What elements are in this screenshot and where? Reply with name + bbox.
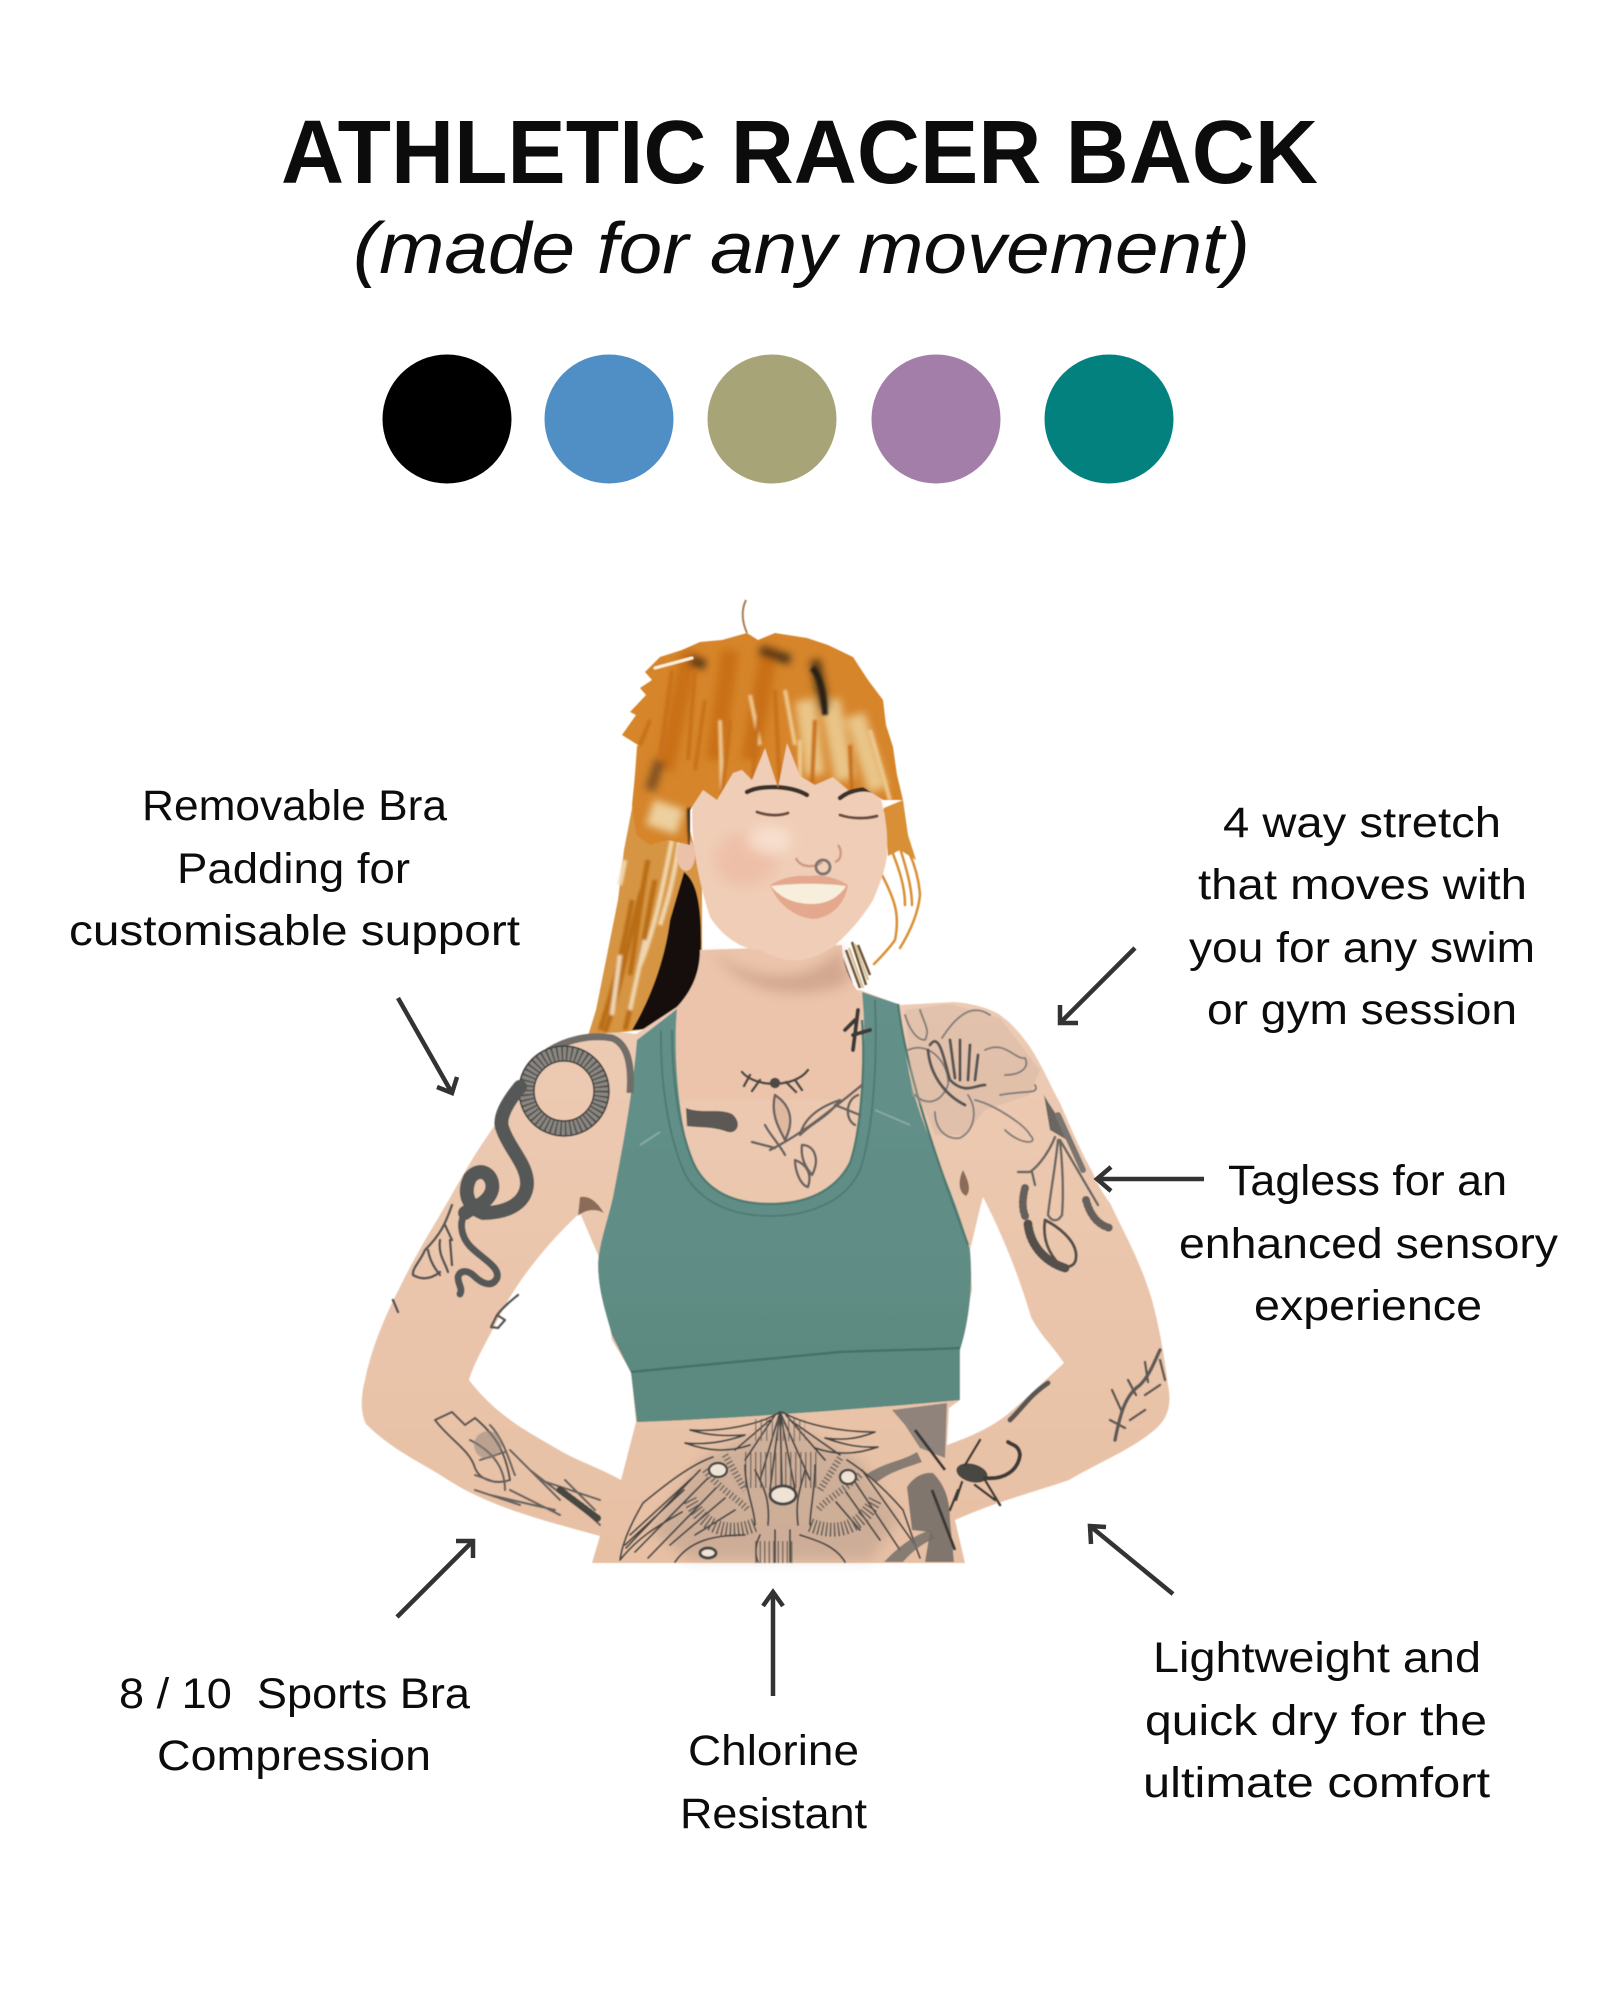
tattoo: snake head on chest	[686, 1108, 738, 1132]
peony centre	[928, 1040, 985, 1105]
arrow: chlorine	[763, 1592, 783, 1696]
arrow: stretch	[1060, 948, 1135, 1023]
tattoo: abdomen wings	[620, 1412, 920, 1562]
swatch: teal	[1044, 354, 1174, 484]
back hair	[588, 745, 920, 1036]
callout: 4 way stretch: that moves with	[1198, 861, 1527, 909]
tattoo: chest branch	[752, 1010, 870, 1187]
callout: tagless: experience	[1254, 1282, 1482, 1330]
callout: removable padding: Padding for	[177, 845, 410, 893]
tattoo: abdomen dark figure	[867, 1403, 955, 1562]
fringe and top hair	[610, 600, 910, 855]
tattoo: right forearm marks and thorn vine	[1010, 1350, 1165, 1440]
tattoo: right forearm scorpion	[950, 1440, 1020, 1510]
eyebrows	[747, 787, 878, 798]
callout: chlorine: Chlorine	[688, 1727, 859, 1775]
callout: chlorine	[680, 1727, 867, 1838]
big wings	[620, 1457, 920, 1560]
wing eyes	[709, 1463, 727, 1477]
callout: compression	[119, 1670, 470, 1780]
armpit shadows	[578, 1170, 969, 1216]
arrow: removable padding	[398, 998, 457, 1093]
upper feathers	[685, 1412, 878, 1453]
callout: lightweight	[1143, 1634, 1490, 1807]
arrow: lightweight	[1090, 1526, 1173, 1594]
model photo illustration	[362, 600, 1169, 1563]
callout: lightweight: quick dry for the	[1145, 1697, 1487, 1745]
tattoo: snake on left arm	[458, 1037, 630, 1294]
back right strands	[842, 942, 870, 988]
callout: tagless: enhanced sensory	[1179, 1220, 1559, 1268]
ear	[677, 839, 695, 871]
underband	[631, 1348, 960, 1422]
callout: 4 way stretch: you for any swim	[1189, 924, 1535, 972]
right wisps	[884, 800, 916, 860]
callout: removable padding	[69, 782, 520, 955]
subtitle: (made for any movement)	[353, 209, 1250, 289]
callout: tagless	[1179, 1157, 1559, 1330]
stems	[1018, 1137, 1098, 1220]
skin: arms and torso	[362, 990, 1169, 1563]
face	[677, 735, 887, 961]
callout: 4 way stretch	[1189, 799, 1535, 1034]
neck	[672, 945, 866, 1100]
swatch: olive	[708, 354, 836, 484]
colour swatches	[382, 354, 1174, 484]
overall tonal shading of the wings	[650, 1420, 900, 1560]
tattoo: left forearm figure	[435, 1412, 600, 1525]
arrow: tagless	[1097, 1167, 1204, 1191]
callout: tagless: Tagless for an	[1228, 1157, 1507, 1205]
gap right of waist	[947, 1197, 1064, 1445]
tattoo: necklace	[742, 1070, 808, 1092]
tattoo: left arm florals	[393, 1205, 518, 1328]
fly traps	[1028, 1224, 1065, 1268]
callout: chlorine: Resistant	[680, 1790, 867, 1838]
callout: 4 way stretch: 4 way stretch	[1223, 799, 1501, 847]
dark leaf	[1044, 1095, 1067, 1140]
swatch: purple	[872, 354, 1000, 484]
callout: compression: 8 / 10 Sports Bra	[119, 1670, 470, 1718]
peony shading	[905, 1004, 1040, 1135]
closed eyes	[757, 812, 877, 818]
callout: compression: Compression	[157, 1732, 431, 1780]
callout: 4 way stretch: or gym session	[1207, 986, 1517, 1034]
arrows	[397, 948, 1204, 1696]
nose and ring	[796, 845, 841, 866]
callout: lightweight: ultimate comfort	[1143, 1759, 1490, 1807]
callout: removable padding: Removable Bra	[142, 782, 447, 830]
swatch: blue	[544, 354, 674, 484]
central plumage hatch	[755, 1419, 805, 1441]
smile	[770, 875, 848, 919]
title: ATHLETIC RACER BACK	[281, 103, 1318, 203]
callout: removable padding: customisable support	[69, 907, 520, 955]
sports bra	[598, 992, 971, 1422]
tattoo: right shoulder peony and fly trap	[905, 1004, 1110, 1268]
swatch: black	[382, 354, 512, 484]
gap left of waist	[469, 1213, 636, 1480]
callout: lightweight: Lightweight and	[1153, 1634, 1481, 1682]
arrow: compression	[397, 1541, 473, 1617]
lower wings	[700, 1548, 716, 1558]
